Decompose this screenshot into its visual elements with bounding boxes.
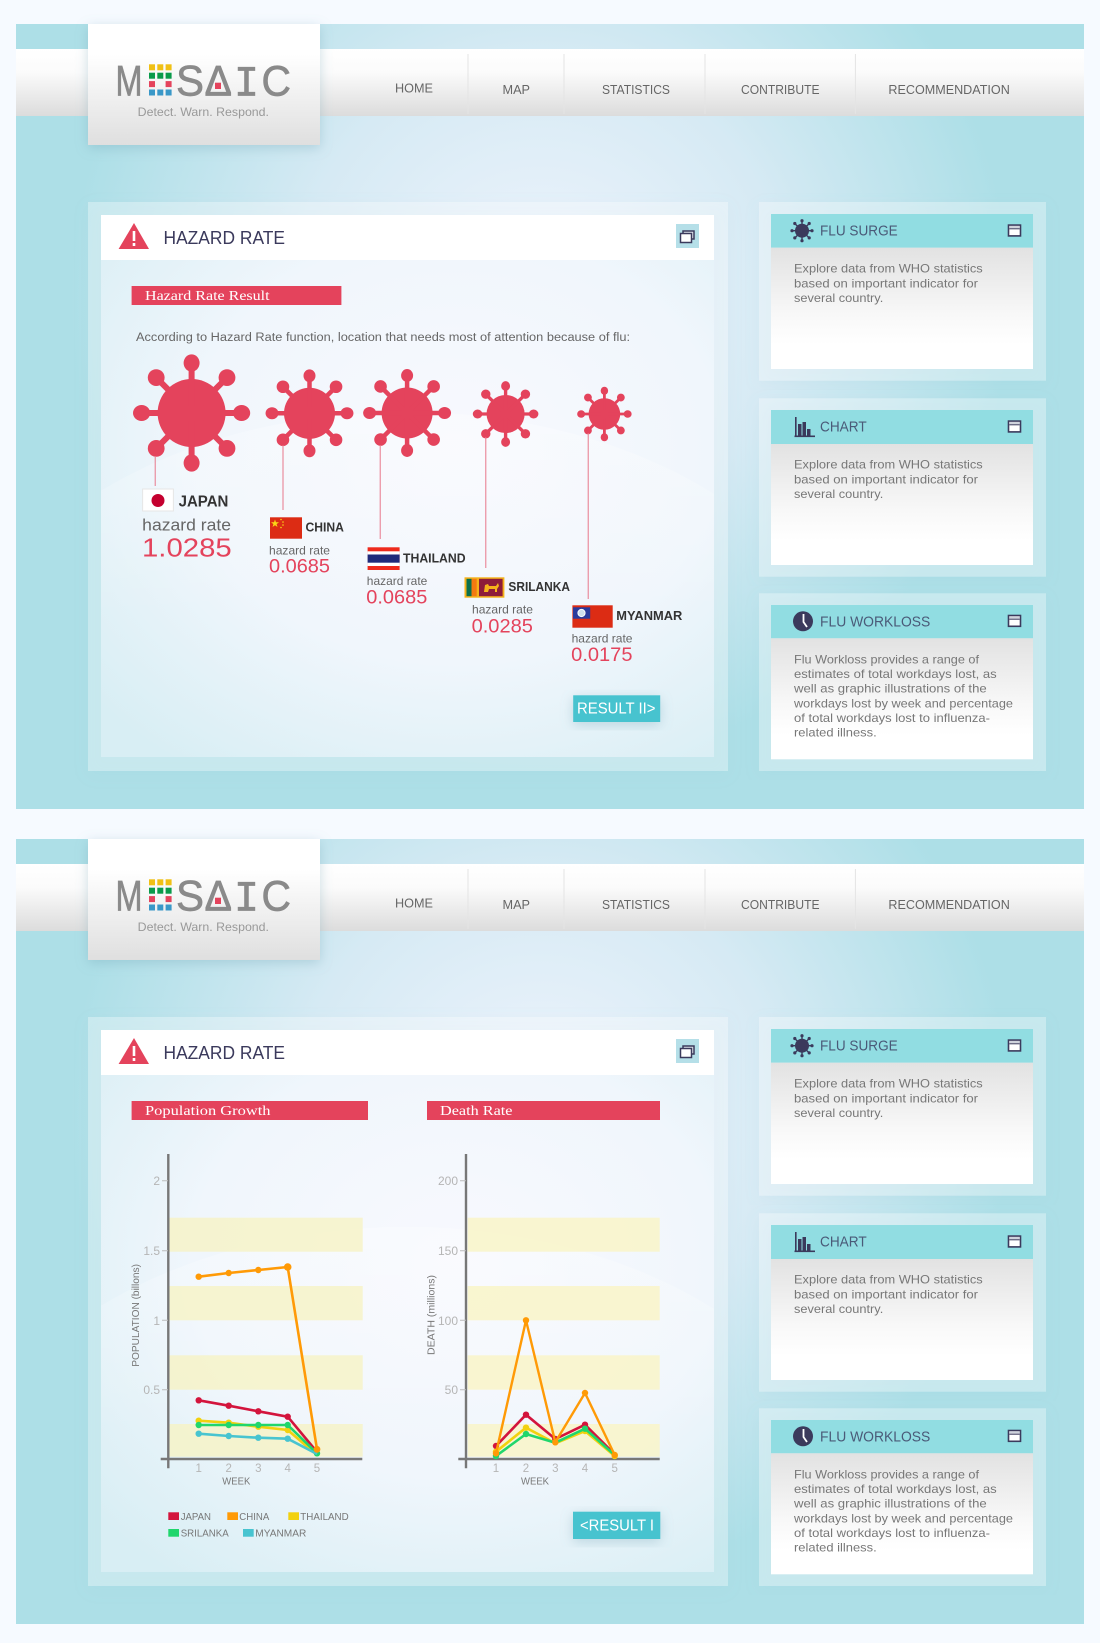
series: Srilanka — [493, 1426, 615, 1459]
navigation bar: HOME — [395, 81, 433, 96]
navigation bar — [16, 864, 1084, 931]
panel: chart — [759, 1213, 1046, 1392]
navigation bar: STATISTICS — [602, 82, 670, 97]
country: China: CHINA — [306, 521, 344, 535]
navigation bar: CONTRIBUTE — [741, 82, 820, 97]
country: China: hazard rate — [269, 543, 330, 557]
screen background — [16, 839, 1084, 1624]
navigation bar — [16, 49, 1084, 116]
country: Japan: hazard rate — [142, 516, 231, 535]
panel: flu workloss: well as graphic illustrations of the — [793, 682, 987, 696]
logo card: S — [176, 58, 204, 106]
series: Srilanka — [196, 1422, 320, 1457]
panel header: HAZARD RATE — [164, 1043, 285, 1063]
panel: flu workloss: Flu Workloss provides a range of — [794, 652, 980, 666]
line chart: death rate: 200 — [438, 1174, 458, 1188]
icon: virus — [790, 1034, 814, 1057]
line chart: population growth: 4 — [284, 1463, 291, 1475]
button: result I: <RESULT I — [580, 1518, 654, 1535]
line chart: population growth: POPULATION (billons) — [130, 1264, 142, 1367]
line chart: death rate: 100 — [438, 1314, 458, 1328]
line chart: population growth: 1.5 — [143, 1244, 160, 1258]
country: Myanmar — [571, 387, 682, 666]
legend: SRILANKA — [181, 1529, 229, 1540]
country: Japan: JAPAN — [179, 494, 228, 511]
country: Myanmar: MYANMAR — [616, 609, 682, 623]
panel: flu surge: Explore data from WHO statistics — [794, 1077, 983, 1091]
button: result II: RESULT II> — [577, 700, 656, 717]
panel: chart: based on important indicator for — [794, 472, 978, 486]
line chart: death rate: 5 — [611, 1463, 618, 1475]
panel: flu workloss: estimates of total workdays lost, as — [794, 1482, 997, 1496]
panel: chart: CHART — [820, 1234, 867, 1251]
section heading bar — [132, 286, 341, 305]
country: China — [266, 369, 353, 577]
panel: chart: Explore data from WHO statistics — [794, 458, 983, 472]
icon: bar chart — [794, 1232, 815, 1252]
line chart: death rate: 2 — [523, 1463, 529, 1475]
series: Japan — [196, 1397, 317, 1452]
panel: flu surge: several country. — [794, 291, 883, 305]
logo card: S — [176, 873, 204, 921]
panel header — [101, 215, 714, 260]
logo card: C — [262, 873, 291, 921]
panel header: HAZARD RATE — [164, 228, 285, 248]
line chart: population growth: 3 — [255, 1463, 262, 1475]
navigation bar: MAP — [502, 897, 530, 912]
line chart: population growth: WEEK — [222, 1475, 250, 1487]
heading: population growth: Population Growth — [145, 1104, 270, 1119]
panel: flu workloss: FLU WORKLOSS — [820, 1429, 930, 1446]
panel: flu workloss: of total workdays lost to influenza- — [794, 711, 990, 725]
panel: flu surge: FLU SURGE — [820, 1038, 898, 1055]
line chart: population growth — [130, 1154, 363, 1487]
line chart: death rate: DEATH (millions) — [425, 1275, 437, 1355]
navigation bar: RECOMMENDATION — [888, 82, 1010, 97]
country: China: 0.0685 — [269, 556, 330, 577]
panel: hazard rate main — [88, 202, 728, 771]
intro text: According to Hazard Rate function, location that needs most of attention because of flu: — [136, 332, 630, 344]
logo card — [88, 839, 320, 960]
line chart: death rate: 50 — [445, 1383, 458, 1397]
panel: flu workloss: well as graphic illustrations of the — [793, 1497, 987, 1511]
logo card: M — [116, 873, 142, 921]
series: Myanmar — [196, 1430, 317, 1454]
logo card — [88, 24, 320, 145]
section heading bar: Hazard Rate Result — [145, 289, 270, 304]
heading: population growth — [132, 1101, 368, 1120]
line chart: death rate: 3 — [552, 1463, 559, 1475]
legend: JAPAN — [181, 1512, 211, 1523]
series: Japan — [493, 1412, 615, 1454]
panel: chart: several country. — [794, 1302, 883, 1316]
panel: chart: Explore data from WHO statistics — [794, 1273, 983, 1287]
logo card: M — [116, 58, 142, 106]
series: China — [196, 1263, 320, 1453]
dashboard screen 1: hazard rate result — [16, 24, 1084, 809]
heading: death rate: Death Rate — [440, 1104, 512, 1119]
country: Japan: 1.0285 — [142, 533, 232, 563]
logo card: I — [234, 875, 259, 924]
line chart: death rate: WEEK — [521, 1475, 549, 1487]
logo card: Δ — [204, 873, 232, 921]
country: Thailand — [363, 369, 466, 608]
panel: flu workloss — [759, 1408, 1046, 1586]
navigation bar: CONTRIBUTE — [741, 897, 820, 912]
legend: MYANMAR — [255, 1529, 306, 1540]
country: Srilanka — [464, 381, 570, 637]
icon: clock — [793, 1426, 813, 1446]
panel: flu surge: based on important indicator for — [794, 1091, 978, 1105]
panel: flu surge — [759, 202, 1046, 381]
country: Thailand: 0.0685 — [366, 587, 427, 608]
panel: flu workloss — [759, 593, 1046, 771]
navigation bar: STATISTICS — [602, 897, 670, 912]
country: Srilanka: SRILANKA — [508, 580, 570, 594]
panel: chart: several country. — [794, 487, 883, 501]
panel: flu workloss: related illness. — [794, 726, 877, 740]
panel: flu workloss: of total workdays lost to influenza- — [794, 1526, 990, 1540]
line chart: population growth: 2 — [153, 1174, 160, 1188]
panel: chart: CHART — [820, 419, 867, 436]
panel: flu surge: Explore data from WHO statistics — [794, 262, 983, 276]
country: Thailand: hazard rate — [367, 574, 428, 588]
legend: THAILAND — [300, 1512, 349, 1523]
panel: flu workloss: related illness. — [794, 1541, 877, 1555]
line chart: death rate — [425, 1154, 660, 1487]
panel header — [101, 1030, 714, 1075]
country: Srilanka: 0.0285 — [472, 616, 533, 637]
navigation bar: HOME — [395, 896, 433, 911]
legend: CHINA — [239, 1512, 270, 1523]
panel: flu surge — [759, 1017, 1046, 1196]
navigation bar: MAP — [502, 82, 530, 97]
country: Myanmar: hazard rate — [572, 632, 633, 646]
icon: clock — [793, 611, 813, 631]
line chart: population growth: 1 — [153, 1314, 160, 1328]
panel: flu workloss: FLU WORKLOSS — [820, 614, 930, 631]
legend — [168, 1512, 349, 1540]
line chart: population growth: 1 — [195, 1463, 202, 1475]
logo card: C — [262, 58, 291, 106]
line chart: population growth: 0.5 — [143, 1383, 160, 1397]
button: result I — [573, 1512, 660, 1539]
country: Japan — [133, 354, 250, 563]
navigation bar: RECOMMENDATION — [888, 897, 1010, 912]
panel: flu workloss: Flu Workloss provides a range of — [794, 1467, 980, 1481]
series: Thailand — [196, 1418, 317, 1455]
panel: flu workloss: workdays lost by week and percentage — [793, 1511, 1013, 1525]
panel: chart: based on important indicator for — [794, 1287, 978, 1301]
logo card: Δ — [204, 58, 232, 106]
heading: death rate — [427, 1101, 660, 1120]
panel: hazard rate charts — [88, 1017, 728, 1586]
line chart: population growth: 5 — [314, 1463, 320, 1475]
country: Myanmar: 0.0175 — [571, 645, 632, 666]
line chart: death rate: 4 — [582, 1463, 589, 1475]
country: Thailand: THAILAND — [403, 551, 466, 565]
panel: flu surge: based on important indicator for — [794, 276, 978, 290]
logo card: Detect. Warn. Respond. — [138, 920, 269, 934]
button: result II — [573, 695, 660, 722]
logo card: Detect. Warn. Respond. — [138, 105, 269, 119]
panel: flu workloss: estimates of total workdays lost, as — [794, 667, 997, 681]
panel: flu surge: FLU SURGE — [820, 223, 898, 240]
panel: flu surge: several country. — [794, 1106, 883, 1120]
series: China — [493, 1317, 618, 1458]
screen background — [16, 24, 1084, 809]
series: Thailand — [493, 1424, 618, 1459]
logo card: I — [234, 60, 259, 109]
icon: bar chart — [794, 417, 815, 437]
icon: virus — [790, 219, 814, 242]
line chart: death rate: 1 — [493, 1463, 499, 1475]
panel: flu workloss: workdays lost by week and percentage — [793, 696, 1013, 710]
line chart: population growth: 2 — [225, 1463, 232, 1475]
dashboard screen 2: population growth and death rate — [16, 839, 1084, 1624]
line chart: death rate: 150 — [438, 1244, 458, 1258]
country: Srilanka: hazard rate — [472, 602, 533, 616]
panel: chart — [759, 398, 1046, 577]
